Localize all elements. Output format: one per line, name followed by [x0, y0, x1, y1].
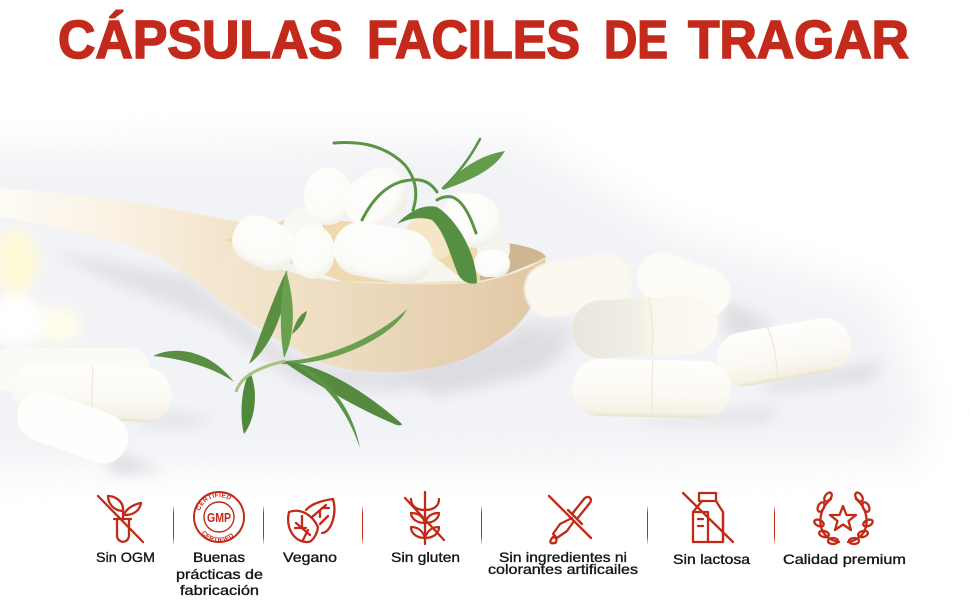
icon: no GMO plant in test tube: [98, 496, 143, 542]
title: FACILES: [367, 10, 580, 70]
product photo: spoon with capsules and rosemary: [0, 139, 925, 474]
feature: Vegano: [283, 499, 337, 565]
feature: Sin gluten: [391, 492, 460, 565]
icon: GMP certified stamp: CERTIFIED: [202, 531, 233, 541]
icon: GMP certified stamp: [193, 491, 245, 543]
label: [176, 549, 263, 598]
rosemary sprig on table: [153, 270, 407, 448]
label: fabricación: [180, 582, 259, 598]
icon: laurel wreath with star: [813, 491, 874, 544]
left flower glow: [0, 230, 82, 346]
title: TRAGAR: [688, 10, 909, 70]
feature: Sin lactosa: [673, 493, 750, 567]
right capsules: [520, 245, 856, 418]
label: Sin gluten: [391, 549, 460, 565]
shadows: [50, 252, 885, 474]
feature: Calidad premium: [783, 491, 906, 567]
surface: [0, 140, 925, 470]
capsule far left: [520, 249, 636, 321]
rosemary sprig in spoon: [334, 139, 505, 284]
label: Vegano: [283, 549, 337, 565]
left capsules: [0, 348, 173, 470]
title: CÁPSULAS: [58, 10, 343, 70]
capsule grey: [571, 294, 719, 360]
icon: GMP certified stamp: GMP: [207, 510, 231, 525]
feature: Sin OGM: [96, 496, 155, 565]
capsule front: [572, 359, 731, 418]
icon: crossed wheat: [405, 492, 444, 544]
spoon: [0, 188, 546, 372]
capsules in spoon: [225, 158, 510, 288]
label: Sin lactosa: [673, 551, 750, 567]
label: Buenas: [193, 549, 245, 565]
feature: Buenas prácticas de fabricación: [176, 491, 263, 598]
capsule back: [0, 348, 150, 392]
label: colorantes artificailes: [488, 561, 638, 577]
dividers: [173, 506, 775, 544]
label: [488, 549, 638, 577]
title: [58, 10, 909, 70]
capsule far right: [630, 245, 737, 325]
capsule angled: [712, 314, 856, 390]
label: Sin ingredientes ni: [499, 549, 627, 565]
icon: two leaves: [288, 499, 334, 542]
icon: GMP certified stamp: CERTIFIED: [196, 493, 231, 510]
capsule front: [10, 384, 135, 470]
icon: crossed milk carton: [683, 493, 733, 542]
title: DE: [604, 10, 668, 70]
label: prácticas de: [176, 566, 263, 582]
label: Calidad premium: [783, 551, 906, 567]
icon: crossed dropper: [549, 496, 591, 543]
capsule middle: [11, 363, 173, 423]
label: Sin OGM: [96, 549, 155, 565]
feature: Sin ingredientes ni colorantes artificailes: [488, 496, 638, 577]
